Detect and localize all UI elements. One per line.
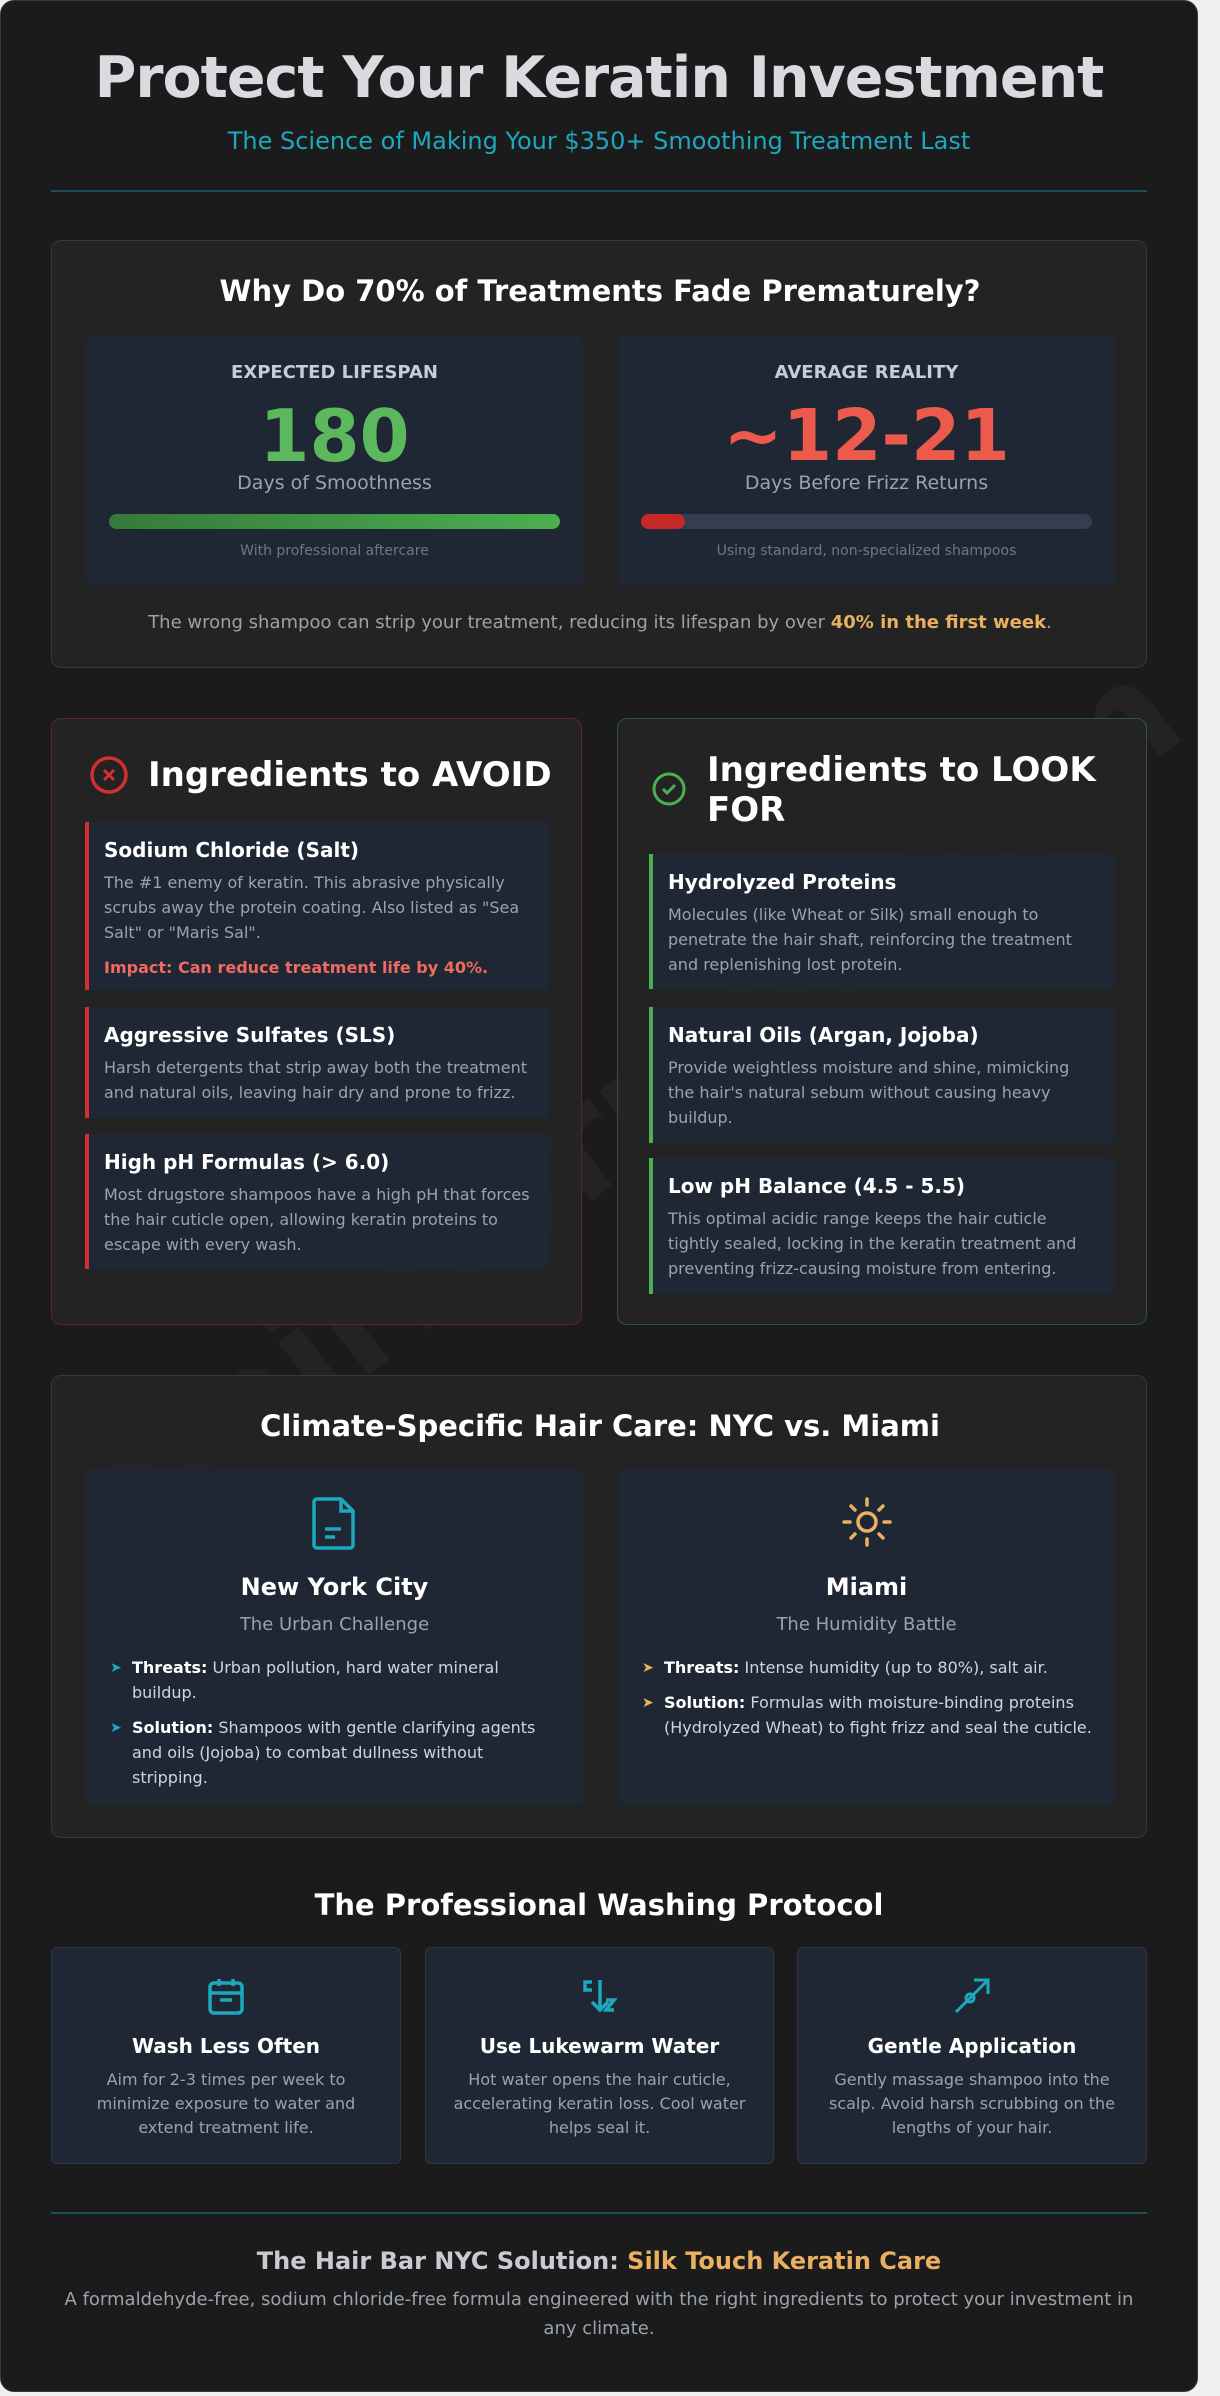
item: oils [649,1007,1115,1143]
icon: sun [842,1497,892,1547]
item: sulfates: Aggressive Sulfates (SLS) [104,1023,395,1047]
item: sulfates: Harsh detergents that strip away both the treatment and natural oils, leaving hair dry and prone to frizz. [104,1058,527,1102]
item: salt: Sodium Chloride (Salt) [104,838,359,862]
footer note: The wrong shampoo can strip your treatment, reducing its lifespan by over 40% in the first week. [148,612,1052,633]
card: Miami: Miami [826,1573,907,1601]
card: NYC: Threats: Urban pollution, hard water mineral buildup. [132,1658,499,1702]
card: NYC [86,1469,583,1805]
subtitle: The Science of Making Your $350+ Smoothing Treatment Last [228,127,970,155]
card: Miami: ➤ [642,1660,654,1676]
card: expected lifespan: 180 [259,394,410,478]
icon: check circle [652,772,686,806]
title: Protect Your Keratin Investment [95,45,1103,111]
item: proteins [649,854,1115,989]
card: lukewarm [425,1947,774,2164]
card: NYC: ➤ [110,1720,122,1736]
footer heading: The Hair Bar NYC Solution: Silk Touch Keratin Care [257,2247,941,2275]
card: expected lifespan: With professional aftercare [240,543,429,559]
card: lukewarm: Use Lukewarm Water [480,2034,719,2058]
heading: Ingredients to LOOK FOR [707,750,1096,830]
item: high pH: High pH Formulas (> 6.0) [104,1150,389,1174]
icon: x circle [90,756,128,794]
item: salt [85,822,550,990]
heading: Ingredients to AVOID [148,755,552,795]
item: proteins: Molecules (like Wheat or Silk) small enough to penetrate the hair shaft, reinforcing the treatment and replenishing lost protein. [668,905,1072,974]
card: gentle: Gentle Application [868,2034,1076,2058]
icon: temperature arrow [583,1980,618,2012]
item: high pH: Most drugstore shampoos have a high pH that forces the hair cuticle open, allowing keratin proteins to escape with every wash. [104,1185,530,1254]
card: lukewarm: Hot water opens the hair cuticle, accelerating keratin loss. Cool water helps seal it. [454,2070,745,2137]
panel: look for [617,718,1147,1325]
card: Miami: The Humidity Battle [776,1614,957,1635]
icon: arrow [955,1978,990,2013]
item: salt: Impact: Can reduce treatment life by 40%. [104,958,488,977]
bar [109,514,560,529]
item: low pH: This optimal acidic range keeps the hair cuticle tightly sealed, locking in the keratin treatment and preventing frizz-causing moisture from entering. [668,1209,1076,1278]
card: expected lifespan: EXPECTED LIFESPAN [231,362,438,383]
item: low pH: Low pH Balance (4.5 - 5.5) [668,1174,965,1198]
card: average reality [618,336,1115,585]
card: wash less: Aim for 2-3 times per week to minimize exposure to water and extend treatment life. [97,2070,355,2137]
item: sulfates [85,1007,550,1118]
card: expected lifespan [86,336,583,585]
item: oils: Natural Oils (Argan, Jojoba) [668,1023,979,1047]
card: expected lifespan: Days of Smoothness [237,472,432,494]
heading: Climate-Specific Hair Care: NYC vs. Miami [260,1409,940,1443]
item: oils: Provide weightless moisture and shine, mimicking the hair's natural sebum without causing heavy buildup. [668,1058,1069,1127]
card: wash less: Wash Less Often [132,2034,320,2058]
card: NYC: Solution: Shampoos with gentle clarifying agents and oils (Jojoba) to combat dullness without stripping. [132,1718,535,1787]
card: average reality: AVERAGE REALITY [775,362,958,383]
card: Miami: Solution: Formulas with moisture-binding proteins (Hydrolyzed Wheat) to fight frizz and seal the cuticle. [664,1693,1092,1737]
item: salt: The #1 enemy of keratin. This abrasive physically scrubs away the protein coating. Also listed as "Sea Salt" or "Maris Sal". [104,873,519,942]
card: average reality: ~12-21 [723,394,1010,477]
card: average reality: Days Before Frizz Returns [745,472,988,494]
footer text: A formaldehyde-free, sodium chloride-free formula engineered with the right ingredients to protect your investment in any climate. [65,2289,1133,2339]
card: NYC: ➤ [110,1660,122,1676]
bar [641,514,1092,529]
card: wash less [51,1947,401,2164]
card: Miami: Threats: Intense humidity (up to 80%), salt air. [664,1658,1048,1677]
panel: avoid [51,718,582,1325]
card: Miami: ➤ [642,1695,654,1711]
watermark: hairbarnyc.com [69,625,1198,1571]
card: NYC: The Urban Challenge [240,1614,429,1635]
icon: calendar [208,1979,244,2015]
icon: document [312,1497,355,1550]
card: NYC: New York City [241,1573,428,1601]
item: low pH [649,1158,1115,1294]
card: Miami [618,1469,1115,1805]
card: average reality: Using standard, non-specialized shampoos [717,543,1016,559]
card: gentle [797,1947,1147,2164]
card: gentle: Gently massage shampoo into the scalp. Avoid harsh scrubbing on the lengths of your hair. [829,2070,1115,2137]
heading: Why Do 70% of Treatments Fade Prematurely? [220,274,980,308]
panel: why fade [51,240,1147,668]
item: high pH [85,1134,550,1269]
item: proteins: Hydrolyzed Proteins [668,870,896,894]
panel: climate [51,1375,1147,1838]
heading: washing protocol: The Professional Washing Protocol [315,1888,883,1922]
